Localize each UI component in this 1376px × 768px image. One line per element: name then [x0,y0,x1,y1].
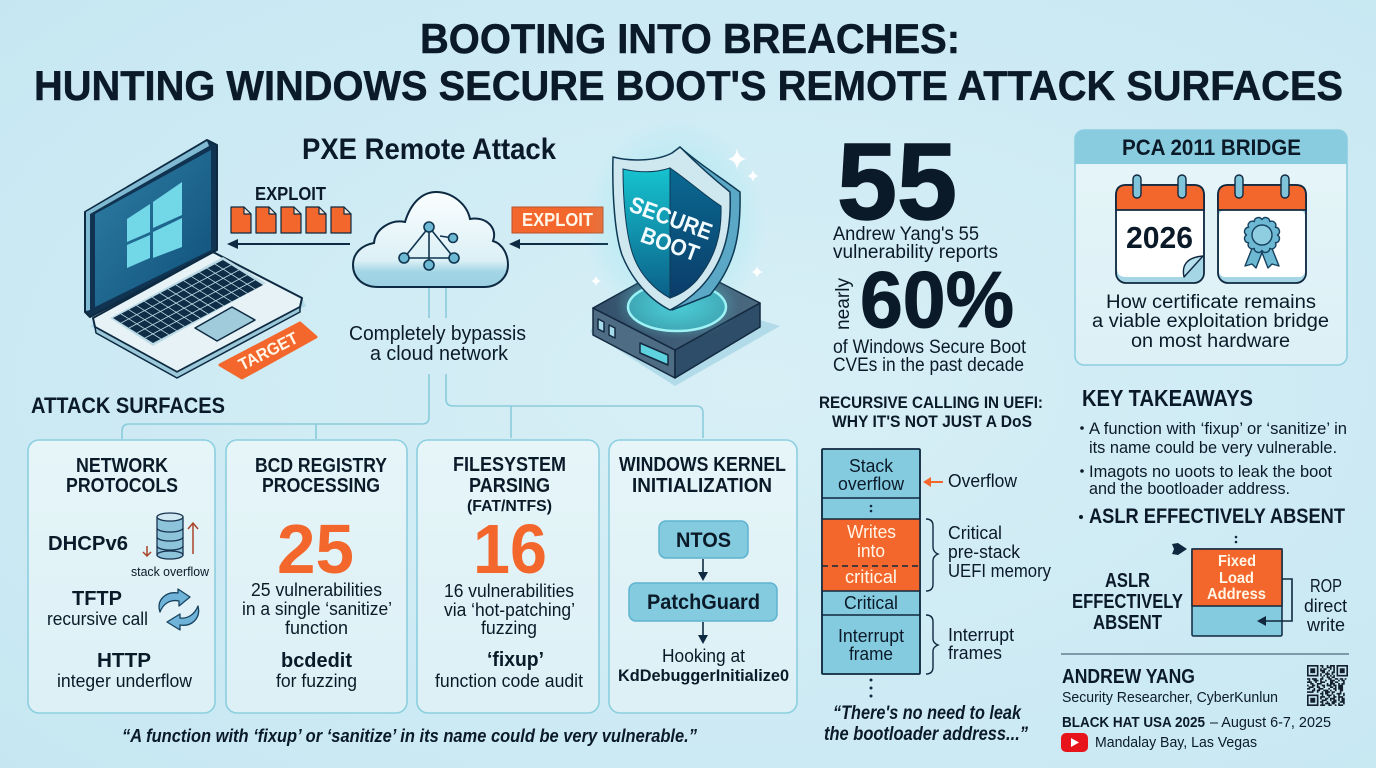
text: takeaway bullets: Imagots no uoots to leak the boot [1089,462,1332,481]
heading: key takeaways: KEY TAKEAWAYS [1082,385,1253,411]
brace: interrupt frames [926,615,1014,674]
text: speaker: ANDREW YANG [1062,666,1195,688]
heading: PROTOCOLS [66,475,178,497]
shield label: SECURE [626,191,716,245]
HTTP text [57,650,193,691]
text: ASLR label: EFFECTIVELY [1072,591,1184,613]
label: exploit files [231,184,351,233]
writes into critical [845,522,897,587]
heading: PCA 2011 BRIDGE [1122,135,1301,160]
NTOS box: NTOS [676,529,731,552]
chart: stack memory diagram [822,449,920,698]
heading: NETWORK [76,455,168,477]
dots below [870,678,872,698]
heading [66,455,178,497]
arrow: ROP direct write: ROP [1310,576,1342,596]
arrow: shield to cloud [509,239,608,249]
stat: 55 reports: vulnerability reports [833,242,998,263]
text: location: Mandalay Bay, Las Vegas [1095,734,1257,751]
description: via ‘hot-patching’ [444,600,575,620]
description: fuzzing [481,618,537,638]
icon: secure boot shield on server [583,120,780,386]
icon: exploit documents [231,207,351,233]
quote: bootloader address [824,703,1028,745]
heading: WINDOWS KERNEL [619,454,786,476]
hooking text [618,646,789,685]
description: How certificate remains [1106,292,1316,313]
panel: BCD registry processing [226,440,407,713]
chart: fixed load address: Load [1219,570,1254,587]
big number 25: 25 [277,510,354,588]
chart: fixed load address: Address [1207,586,1266,603]
panel: network protocols [28,440,215,713]
fixup: function code audit [435,671,583,691]
stack overflow label [838,456,905,494]
text: ASLR label: ASLR [1105,570,1150,592]
HTTP text: HTTP [97,650,151,672]
interrupt frame: frame [849,644,893,664]
heading: FILESYSTEM [453,454,566,476]
title: BOOTING INTO BREACHES: [420,15,960,62]
panel: PCA 2011 bridge [1075,130,1347,365]
text: speaker: Security Researcher, CyberKunlun [1062,689,1278,706]
icon: secure boot shield on server: BOOT [637,222,703,266]
text: event [1062,714,1331,731]
heading [255,455,388,497]
text: takeaway bullets: its name could be very vulnerable. [1089,438,1337,457]
arrow: cloud to laptop [227,239,350,249]
description: function [285,618,348,638]
icon: video play [1061,733,1088,752]
stat: nearly 60% [833,255,1027,376]
stat: 55 reports: Andrew Yang's 55 [833,224,979,245]
description: on most hardware [1131,331,1290,352]
TFTP text [47,588,148,629]
arrow: ROP direct write [1257,576,1347,635]
brace: critical memory: pre-stack [948,542,1021,562]
interrupt frame [838,626,904,664]
description: 16 vulnerabilities [444,581,574,601]
heading: (FAT/NTFS) [467,498,552,515]
heading: recursive calling: RECURSIVE CALLING IN UEFI: [819,393,1043,412]
server [593,261,760,378]
DHCPv6 label: DHCPv6 [48,533,128,555]
chart: fixed load address: Fixed [1218,553,1256,570]
label: target tag: TARGET [235,328,302,374]
heading: recursive calling [819,393,1043,431]
interrupt frame: Interrupt [838,626,904,646]
arrow: overflow: Overflow [948,471,1018,491]
writes into critical: into [857,541,885,561]
brace: critical memory: UEFI memory [948,561,1051,581]
quote: bootloader address: “There's no need to leak [833,703,1022,724]
title [34,15,1343,109]
icon: cloud network [353,192,508,287]
hooking text: KdDebuggerInitialize0 [618,666,789,685]
icon: calendar 2026 [1116,175,1204,283]
heading [453,454,566,515]
brace: interrupt frames: frames [948,643,1002,663]
shield body [672,147,740,310]
PatchGuard box: PatchGuard [647,591,760,614]
icon: windows logo [127,182,182,268]
chart: fixed load address [1172,536,1282,636]
heading: recursive calling: WHY IT'S NOT JUST A DoS [832,412,1032,431]
NTOS box [659,521,748,558]
keyboard [110,257,266,346]
description: a viable exploitation bridge [1092,311,1329,332]
HTTP text: integer underflow [57,671,193,691]
TFTP text: TFTP [72,588,122,610]
label: exploit tag: EXPLOIT [522,210,593,230]
text: ASLR label: ABSENT [1093,612,1162,634]
TFTP text: recursive call [47,609,148,629]
panel: filesystem parsing [417,440,599,713]
brace: critical memory: Critical [948,523,1002,543]
bcdedit [276,650,357,691]
brace: critical memory [926,519,1051,591]
dots [870,505,872,512]
stat: nearly 60%: of Windows Secure Boot [833,337,1027,358]
icon: target laptop [85,140,306,379]
description: in a single ‘sanitize’ [242,599,392,619]
stack overflow label: Stack [849,456,894,476]
description [1092,292,1329,352]
sparkles [591,148,763,286]
arrow: ROP direct write: write [1306,615,1345,635]
arrow: ROP direct write: direct [1304,596,1347,616]
text: takeaway bullets [1080,419,1347,498]
icon: recursive arrows [159,589,199,630]
arrows: stack direction [143,523,198,556]
brace: interrupt frames: Interrupt [948,625,1014,645]
stack overflow label: stack overflow [131,564,210,579]
writes into critical: critical [845,567,897,587]
stat: nearly 60%: 60% [860,255,1014,344]
arrow [698,622,708,644]
text: event: – August 6-7, 2025 [1210,714,1331,731]
label: exploit tag [512,207,603,233]
heading: INITIALIZATION [632,475,772,497]
text: ASLR label [1072,570,1184,634]
panel: windows kernel initialization [609,440,797,713]
quote: bootloader address: the bootloader address...” [824,724,1028,745]
text: event: BLACK HAT USA 2025 [1062,715,1205,731]
heading: PARSING [469,475,550,497]
bcdedit: for fuzzing [276,671,357,691]
bcdedit: bcdedit [281,650,352,672]
description [444,581,575,638]
description [242,580,392,638]
text: speaker [1062,666,1278,706]
stat: 55 reports: 55 [837,121,957,243]
icon: stack database [157,513,183,559]
title: HUNTING WINDOWS SECURE BOOT'S REMOTE ATTACK SURFACES [34,62,1343,109]
hooking text: Hooking at [662,646,745,666]
label: exploit files: EXPLOIT [255,184,326,204]
icon: QR code [1307,666,1347,705]
PatchGuard box [629,583,777,621]
fixup [435,649,583,691]
writes into critical: Writes [847,522,896,542]
heading: PROCESSING [262,475,380,497]
connector lines to attack surfaces [122,287,703,439]
stat: nearly 60%: nearly [833,277,854,330]
text: bypass caption [349,323,526,365]
icon: ribbon [1245,218,1279,268]
icon: calendar 2026: 2026 [1126,220,1193,255]
big number 16: 16 [473,510,547,588]
critical: Critical [844,593,898,613]
arrow [698,559,708,581]
stat: nearly 60%: CVEs in the past decade [833,355,1024,376]
description: 25 vulnerabilities [251,580,382,600]
heading [619,454,786,497]
label: target tag [220,323,316,378]
text: takeaway bullets: and the bootloader address. [1089,479,1290,498]
heading: BCD REGISTRY [255,455,388,477]
stat: 55 reports [833,121,998,263]
text: bypass caption: a cloud network [370,343,509,365]
stack overflow label: overflow [838,474,905,494]
heading: PXE Remote Attack: PXE Remote Attack [302,133,556,166]
quote: fixup or sanitize: “A function with ‘fixup’ or ‘sanitize’ in its name could be very vulnerable.” [122,726,697,746]
icon: calendar certificate [1218,175,1306,283]
fixup: ‘fixup’ [487,649,544,671]
heading: ASLR effectively absent: ASLR EFFECTIVELY ABSENT [1089,505,1345,528]
heading: attack surfaces: ATTACK SURFACES [31,393,225,418]
text: bypass caption: Completely bypassis [349,323,526,345]
text: takeaway bullets: A function with ‘fixup’ or ‘sanitize’ in [1089,419,1347,438]
